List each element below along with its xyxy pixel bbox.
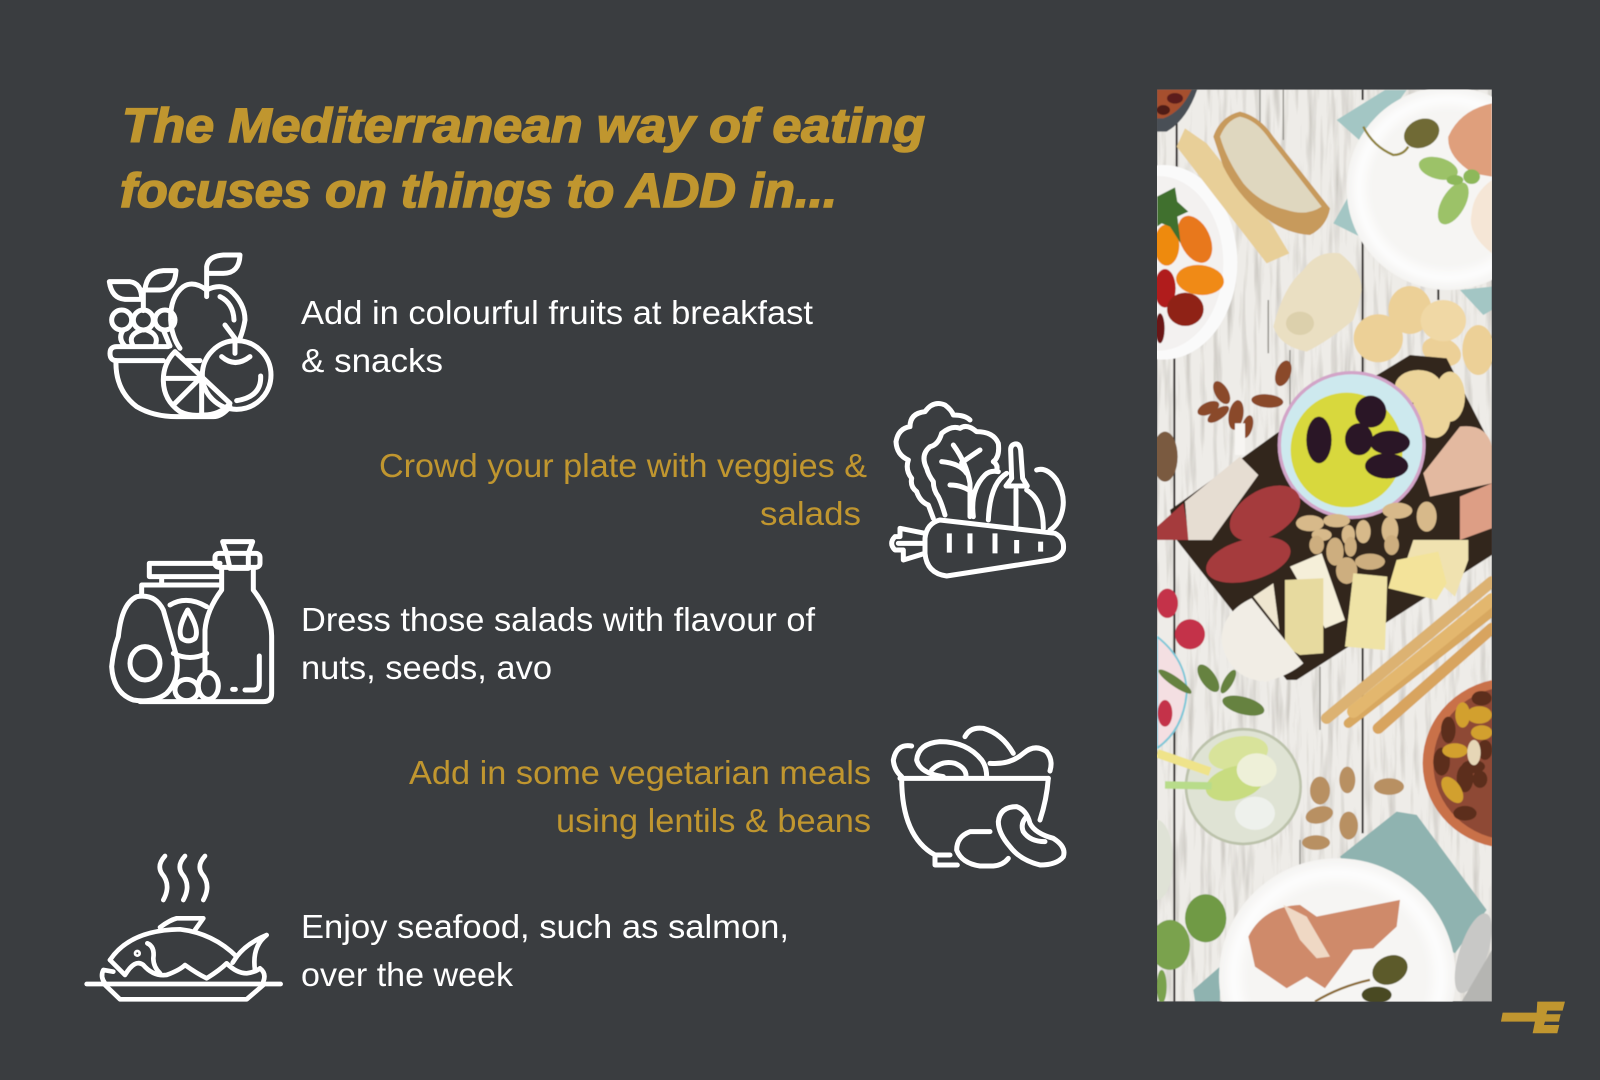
photo: dish of olives in oil xyxy=(1278,371,1426,519)
photo: basil leaves xyxy=(1150,894,1226,1003)
photo: lower half of the table xyxy=(1141,535,1597,1080)
title: The Mediterranean way of eating xyxy=(122,100,925,153)
logo: fork-shaped E mark xyxy=(1501,1002,1565,1033)
photo: breadsticks xyxy=(1327,582,1492,728)
text block: seafood: over the week xyxy=(301,956,514,993)
photo: napkin bottom xyxy=(1193,812,1487,1002)
photo: loose pistachios xyxy=(1302,767,1404,850)
text block: healthy fats xyxy=(301,601,816,686)
text block: seafood: Enjoy seafood, such as salmon, xyxy=(301,908,789,945)
text block: fruits xyxy=(301,294,813,379)
photo: napkin top xyxy=(1333,90,1492,315)
photo: almonds xyxy=(1195,358,1295,439)
icon: vegetables xyxy=(892,403,1064,576)
photo: pistachios under dish xyxy=(1309,535,1399,584)
icon: fruit bowl xyxy=(109,255,271,417)
text block: vegetarian meals xyxy=(409,754,871,839)
text block: veggies: Crowd your plate with veggies & xyxy=(379,447,867,484)
photo: Mediterranean food spread on a white wooden table xyxy=(1157,89,1492,1002)
photo: raspberries and small dish xyxy=(1157,589,1205,748)
photo: sliced bread xyxy=(1177,112,1362,352)
photo: plate with caper and ham xyxy=(1347,87,1550,290)
photo: crackers on board xyxy=(1395,370,1465,442)
text block: seafood xyxy=(301,908,789,993)
photo: pistachios xyxy=(1296,502,1437,545)
photo: cutlery xyxy=(1454,913,1492,1002)
photo: salami xyxy=(1157,423,1310,591)
icon: avocado, jar and oil bottle xyxy=(112,542,272,702)
photo: mint xyxy=(1158,664,1265,716)
photo: walnut xyxy=(1157,431,1178,482)
photo: glass with lime and straws xyxy=(1141,729,1301,900)
photo: sliced ham on board xyxy=(1423,426,1492,540)
text block: fruits: & snacks xyxy=(301,342,443,379)
text block: vegetarian meals: using lentils & beans xyxy=(556,802,871,839)
photo: olive dish top-left xyxy=(1157,89,1197,132)
title: focuses on things to ADD in... xyxy=(120,165,837,218)
photo: crackers xyxy=(1354,286,1494,375)
photo: bowl of tomatoes xyxy=(1089,165,1237,360)
text block: veggies xyxy=(379,447,867,532)
text block: veggies: salads xyxy=(760,495,861,532)
icon: bowl of lentils and beans xyxy=(893,728,1064,866)
title xyxy=(120,100,925,218)
wood plank gaps xyxy=(1174,89,1438,1002)
text block: fruits: Add in colourful fruits at breakfast xyxy=(301,294,813,331)
photo: terracotta bowl of nuts xyxy=(1423,678,1597,848)
photo: wooden serving board xyxy=(1170,355,1492,680)
text block: healthy fats: nuts, seeds, avo xyxy=(301,649,552,686)
photo: cheese selection xyxy=(1222,540,1468,682)
photo: plate with ham and capers xyxy=(1218,858,1456,1002)
icon: fish on a plate with steam xyxy=(87,856,281,999)
text block: vegetarian meals: Add in some vegetarian meals xyxy=(409,754,871,791)
text block: healthy fats: Dress those salads with flavour of xyxy=(301,601,816,638)
